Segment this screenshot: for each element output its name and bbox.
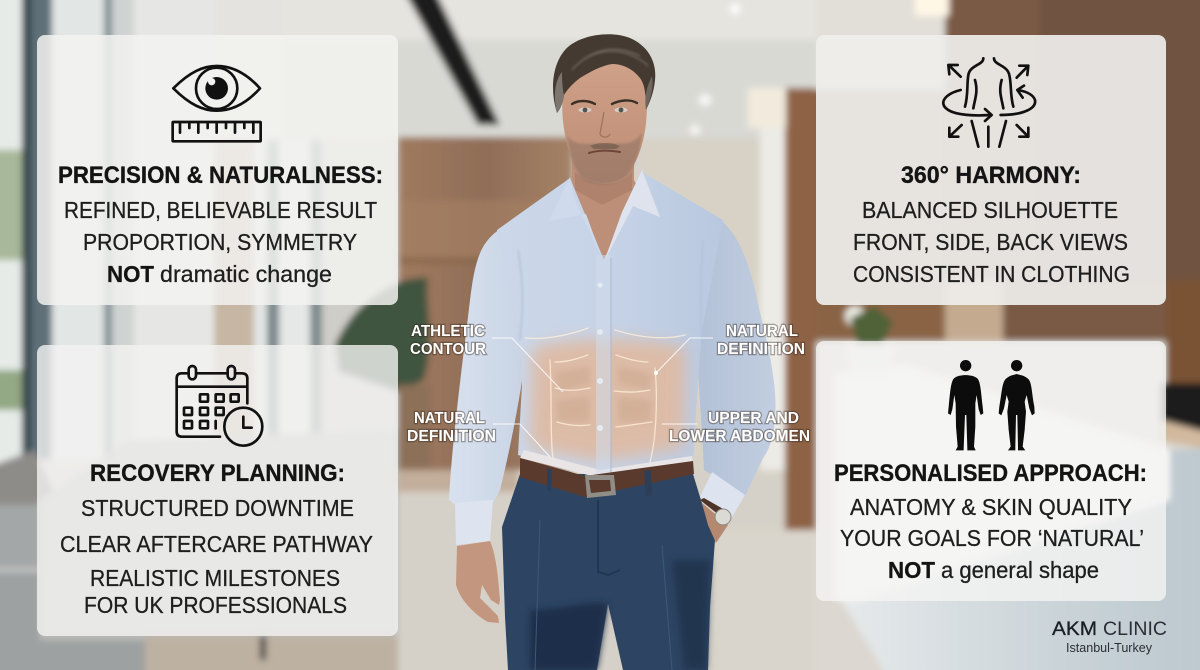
callout: natural definition lower left: DEFINITION xyxy=(407,428,496,445)
collar xyxy=(549,177,602,258)
text block: REFINED, BELIEVABLE RESULT xyxy=(64,197,377,223)
cuffs xyxy=(455,500,493,545)
heading: PRECISION & NATURALNESS: xyxy=(58,162,383,189)
text block: dramatic change xyxy=(160,261,332,287)
text block: CLEAR AFTERCARE PATHWAY xyxy=(60,531,373,557)
figure: man in shirt xyxy=(449,34,776,670)
text block: FRONT, SIDE, BACK VIEWS xyxy=(853,229,1128,255)
text block: BALANCED SILHOUETTE xyxy=(862,197,1118,223)
belt xyxy=(520,458,694,497)
callout: upper and lower abdomen xyxy=(662,410,810,445)
shirt body xyxy=(497,172,723,478)
logo: AKM Clinic: Istanbul-Turkey xyxy=(1066,640,1152,655)
callout: upper and lower abdomen: UPPER AND xyxy=(708,410,799,427)
eyes and brows xyxy=(572,101,595,104)
heading: RECOVERY PLANNING: xyxy=(90,460,345,487)
heading: PERSONALISED APPROACH: xyxy=(834,460,1147,487)
text block: YOUR GOALS FOR ‘NATURAL’ xyxy=(840,525,1144,551)
logo: AKM Clinic: AKM xyxy=(1052,619,1097,640)
shirt placket xyxy=(596,255,611,477)
callout: natural definition upper right xyxy=(654,323,805,375)
text block: FOR UK PROFESSIONALS xyxy=(84,592,347,618)
callout: athletic contour: CONTOUR xyxy=(410,341,486,358)
panel: personalised approach xyxy=(816,341,1166,601)
callout: natural definition lower left: NATURAL xyxy=(414,410,485,427)
heading: 360° HARMONY: xyxy=(901,162,1081,189)
right hand and watch xyxy=(702,503,728,543)
text block: CONSISTENT IN CLOTHING xyxy=(853,261,1130,287)
text block: a general shape xyxy=(941,557,1099,583)
callout: natural definition lower left xyxy=(407,410,550,457)
panel: recovery planning xyxy=(37,345,398,636)
callout: upper and lower abdomen: LOWER ABDOMEN xyxy=(669,428,810,445)
text block: REALISTIC MILESTONES xyxy=(90,565,340,591)
panel: 360 harmony xyxy=(816,35,1166,305)
callout: natural definition upper right: NATURAL xyxy=(726,323,798,340)
icon: calendar with clock xyxy=(177,366,262,446)
callout: natural definition upper right: DEFINITION xyxy=(717,341,805,358)
icon: torso with rotation arrows xyxy=(943,58,1035,147)
icon: two body silhouettes xyxy=(948,360,1035,450)
text block: ANATOMY & SKIN QUALITY xyxy=(850,494,1132,520)
text block: PROPORTION, SYMMETRY xyxy=(83,229,357,255)
trousers xyxy=(502,474,715,670)
callout: athletic contour xyxy=(410,323,563,392)
text block xyxy=(64,197,377,287)
text block xyxy=(840,494,1144,583)
beard xyxy=(567,132,642,184)
text block: STRUCTURED DOWNTIME xyxy=(81,495,354,521)
hair xyxy=(553,34,655,113)
panel: precision and naturalness xyxy=(37,35,398,305)
left hand xyxy=(456,541,500,623)
text block: NOT xyxy=(107,261,154,287)
text block: NOT xyxy=(888,557,935,583)
abdomen skin reveal xyxy=(530,339,686,462)
text block xyxy=(60,495,373,618)
right sleeve xyxy=(685,218,776,496)
callout: athletic contour: ATHLETIC xyxy=(411,323,485,340)
head xyxy=(553,34,655,184)
left sleeve xyxy=(449,226,535,505)
logo: AKM Clinic: CLINIC xyxy=(1103,619,1167,640)
icon: eye with ruler xyxy=(173,66,261,141)
text block xyxy=(853,197,1130,287)
nose and mouth xyxy=(600,112,610,137)
neck xyxy=(560,150,650,262)
abs contour lines xyxy=(525,328,685,462)
logo: AKM Clinic xyxy=(1052,619,1167,655)
